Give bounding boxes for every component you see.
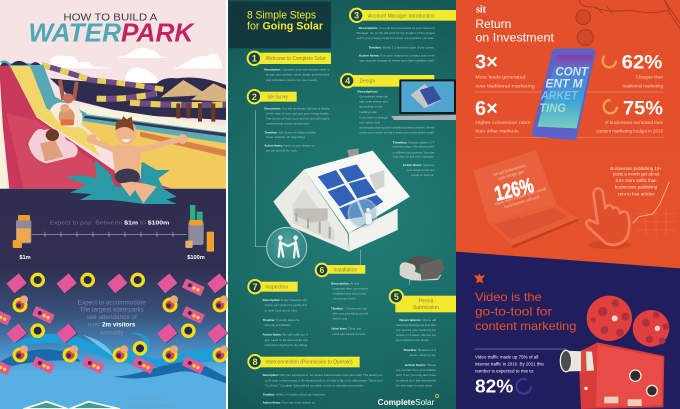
step 3 <box>350 9 456 63</box>
step 7: you need to be around for the <box>265 338 308 342</box>
text: liquidity: You will need <box>129 396 164 402</box>
text: article publishing: businesses publishing <box>615 184 658 189</box>
step 7 <box>248 280 308 347</box>
step 3: Description: You will be introduced to your Account <box>359 26 435 30</box>
step 4: your system look <box>359 121 380 125</box>
stat: 62 percent: 62% <box>622 52 662 73</box>
step 5: Description: Once all <box>399 318 436 322</box>
step 4: Our engineers design the <box>359 95 388 99</box>
step 3: Action Items: It is your chance to contact and meet <box>359 54 435 58</box>
tube slides <box>42 65 226 105</box>
step 1: 1 <box>252 54 257 64</box>
section background <box>228 0 456 409</box>
step 6: important step, our trained <box>333 286 368 290</box>
illustration: laptop: 126% <box>492 174 536 206</box>
step 4: Action Items: Approve <box>403 163 435 167</box>
illustration: laptop: Small businesses <box>493 163 526 177</box>
step 7: review your system for quality and <box>265 303 307 307</box>
section: top scene background <box>0 0 226 189</box>
illustration: phone: CONT <box>555 65 589 78</box>
slides <box>0 60 172 189</box>
step 4: 4 <box>345 76 350 86</box>
illustration: laptop: with blogs get <box>498 169 525 181</box>
step 4: on different city processes. Your plan <box>393 150 435 154</box>
step 4: If you wish to change <box>359 115 388 119</box>
solar panels <box>318 164 383 219</box>
step 6: Timeline: 1-3 hours per day <box>331 306 367 310</box>
step 5: are sent to your local city for <box>396 328 436 332</box>
step 2: This survey will take up to an hour and will require <box>266 117 330 121</box>
text: visitors: Expect to accommodate <box>78 299 146 306</box>
step 8: "Go Solar!" Complete Solar will tell you when to turn on and start your system. <box>265 384 365 388</box>
step 7: Inspection <box>265 284 288 290</box>
pool-float pattern <box>0 273 229 376</box>
stat: six times <box>475 98 531 134</box>
step 5: weeks, varies by city. <box>410 353 436 357</box>
stat: 82 percent <box>475 376 531 397</box>
step 7: same day as installation. <box>265 323 291 327</box>
section: video background <box>456 252 680 409</box>
step 6: permit team inspects the home. <box>333 332 366 336</box>
cost timeline <box>32 232 187 237</box>
step 4 <box>341 74 435 177</box>
figure: boy with arms up <box>50 80 82 128</box>
illustration: laptop: more new people than small <box>494 186 547 207</box>
step 2: of the state of your roof and your energy habits. <box>266 112 329 116</box>
text: article publishing: Businesses publishing 16+ <box>610 166 662 171</box>
connector lines <box>255 110 423 285</box>
step 1: Welcome to Complete Solar <box>266 56 326 62</box>
gable shading <box>293 188 334 242</box>
icon: pointer hand <box>586 188 631 249</box>
stat: three times: 3× <box>475 52 498 74</box>
stat: 62 percent <box>603 52 663 88</box>
lens <box>560 350 594 373</box>
text: video traffic: Video traffic made up 75% of all <box>475 355 538 360</box>
icon: money jar large <box>185 205 214 252</box>
step 5: review in 2-6 weeks, after the city <box>396 333 436 337</box>
illustration: phone: TING <box>539 102 566 115</box>
stat: three times: More leads generated <box>475 74 526 79</box>
illustration: hand dropping coins <box>576 0 680 45</box>
stat: 75 percent: content marketing budget in 2016 <box>596 129 663 134</box>
step 5: Permit <box>419 299 434 305</box>
step 5: are permits from your utilities <box>396 368 437 372</box>
step 2: 2 <box>252 92 257 102</box>
text: liquidity <box>129 396 175 409</box>
stat: three times: over traditional marketing <box>475 83 535 88</box>
camera body <box>579 342 664 409</box>
illustration: laptop: businesses without <box>504 194 541 209</box>
step 7: 7 <box>252 282 258 292</box>
dormer <box>369 170 384 190</box>
step 4: may vary so ask your manager. <box>393 155 434 159</box>
divider <box>474 91 664 93</box>
waves <box>0 333 226 383</box>
divider <box>474 348 566 350</box>
panel: return on investment <box>456 0 680 409</box>
icon: laptop with house <box>391 79 456 120</box>
stat: 75 percent: 75% <box>623 98 663 119</box>
stat: 75 percent: of businesses increased their <box>605 120 663 125</box>
heading: 8 Simple Steps <box>247 9 316 21</box>
step 6: Installation <box>333 267 357 273</box>
step 3: and is your primary contact to answer any questions you have. <box>357 36 435 40</box>
figure: boy in foreground <box>87 116 188 203</box>
step 7: inspection signing for city filings. <box>265 343 308 347</box>
step 7: Action Items: We will notify you if <box>263 332 308 336</box>
step 6: onto and go to finish. <box>333 296 356 300</box>
step 5: Timeline: Between 2-6 <box>403 348 436 352</box>
heading: return on investment <box>475 17 555 44</box>
section: lower water park background <box>0 188 226 409</box>
section background <box>456 0 680 409</box>
heading: video: content marketing <box>475 319 576 333</box>
reel right <box>633 310 669 347</box>
step 8: roof's solar to feed energy to the electrical grid so it's right to flip on by utility power. This is your <box>265 378 383 382</box>
heading: return on investment: Return <box>475 17 511 31</box>
label: one million: $1m <box>19 255 31 261</box>
chimney <box>347 148 359 159</box>
text: video traffic <box>475 355 544 373</box>
pool deck and water <box>77 105 226 189</box>
text: visitors: see attendance of <box>87 314 137 321</box>
step 6: week to stay. <box>333 316 348 320</box>
step 2: Action Items: Agree to your design so <box>264 144 315 148</box>
step 2: Description: Our site technician will look at details <box>264 107 330 111</box>
text: article publishing <box>610 166 662 197</box>
step 6: Action Items: Check, and <box>331 326 361 330</box>
step 4: Description: <box>357 90 378 94</box>
step 4: review your system so that it meets your needs before install. <box>359 131 434 135</box>
step 4: Design <box>360 79 375 85</box>
step 8: 8 <box>252 357 258 367</box>
balcony <box>294 208 328 223</box>
columns <box>296 213 330 238</box>
logo: sit: sit <box>476 5 487 16</box>
step 4: business days. We will proceed <box>393 145 435 149</box>
step 2: one week of signing. <box>266 135 306 139</box>
step 1: and calculates solution for your needs. <box>266 78 318 82</box>
logo: Complete Solar: CompleteSolar <box>378 397 435 407</box>
step 8 <box>248 355 383 405</box>
text: visitors: annually <box>100 329 124 336</box>
splash <box>65 160 177 204</box>
step 2: Timeline: Site Survey is finished within <box>264 130 316 134</box>
step 3: Manager. He or she will work for the duration of the project <box>357 31 435 35</box>
chart: traffic growth <box>633 182 676 237</box>
step 5 <box>390 290 456 388</box>
illustration: film camera <box>560 296 669 409</box>
stat: six times: Higher conversion rates <box>475 120 531 125</box>
step 1: ensure your system meets design and electrical <box>266 73 330 77</box>
illustration: laptop <box>473 150 579 248</box>
step 2 <box>248 90 330 153</box>
icon: money jar small <box>13 215 31 248</box>
stat: 62 percent: Cheaper than <box>636 74 663 79</box>
step 5: and solutions to the annex. <box>396 338 429 342</box>
step 3: 3 <box>354 11 359 21</box>
step 6: installation team will put solar <box>333 291 366 295</box>
step 8: Timeline: Within 2-4 weeks of final city inspection. <box>263 392 326 396</box>
step 8: Action Items: Turn your solar system on. <box>263 401 316 405</box>
heading: video: Video is the <box>475 290 542 304</box>
step 6: with most jobs taking one full <box>333 311 368 315</box>
panel: water park <box>0 0 229 409</box>
step 5: for this step in your area. <box>396 384 433 388</box>
heading: video <box>475 290 576 333</box>
lens: solar installer <box>348 199 377 228</box>
step 5: necessary drawings are final, files <box>396 323 436 327</box>
stat: six times: than other methods <box>475 129 519 134</box>
step 3: Timeline: Within 1-2 business days of the survey. <box>369 45 435 49</box>
text: article publishing: zero to four articles <box>618 192 654 197</box>
divider <box>474 136 664 139</box>
text: visitors: The largest waterparks <box>79 307 144 314</box>
step 7: to meet local permit rules. <box>265 308 298 312</box>
trees <box>50 78 226 120</box>
step 5: to submit your site documents <box>396 379 436 383</box>
step 5: with. If so, you may also have <box>396 373 436 377</box>
reel left <box>587 296 632 341</box>
step 1 <box>248 52 331 82</box>
side wall <box>349 208 398 252</box>
icon: permit stamp <box>400 256 444 281</box>
heading: video: go-to-tool for <box>475 305 552 319</box>
illustration: phone: ENT M <box>545 78 583 91</box>
camera dials <box>630 370 641 381</box>
step 5: Submission <box>413 305 439 311</box>
step 3: Account Manager Introduction <box>368 13 435 19</box>
step 4: right solar system and <box>359 100 388 104</box>
stat: six times: 6× <box>475 98 498 120</box>
text: visitors: over 2m visitors <box>88 322 136 329</box>
step 4: aesthetically pleasing and is installed and kept consistent. We will <box>359 126 435 130</box>
step 4: Timeline: Survey within 2-7 <box>393 140 435 144</box>
illustration: phone: ARKET <box>540 90 578 103</box>
text: visitors <box>78 299 146 336</box>
figure: boy sliding headfirst <box>28 129 78 163</box>
step 2: we can specify the work. <box>266 149 298 153</box>
heading <box>247 9 324 32</box>
heading box <box>229 2 331 48</box>
stat: 82 percent: 82% <box>475 376 514 397</box>
step 2: Site Survey <box>267 94 288 100</box>
step 4: your design so we can <box>407 168 435 172</box>
heading: for Going Solar <box>247 20 324 32</box>
huts <box>161 80 226 122</box>
step 5: 5 <box>394 292 399 302</box>
pool illustrations <box>23 402 120 409</box>
text: expected cost: Expect to pay: Between $1m to $100m <box>49 220 169 226</box>
step 8: Description: With your signed permit, we request interconnection from your utility. This allows your <box>263 373 383 377</box>
circle: handshake <box>267 227 307 267</box>
step 3: your account manager to review your solar installation plan. <box>360 59 435 63</box>
text: video traffic: number is expected to rise to: <box>475 368 534 373</box>
icon: video star <box>474 273 485 283</box>
panel: going solar <box>228 0 456 409</box>
text: video traffic: internet traffic in 2016. By 2021 this <box>475 361 544 366</box>
text: article publishing: posts a month get about <box>613 172 660 177</box>
stat: three times <box>475 52 535 88</box>
step 4: according to city <box>359 105 383 109</box>
step 1: Description: Complete Solar will introduce itself to <box>264 67 330 71</box>
illustration: phone <box>532 49 595 140</box>
illustration: house with solar panels <box>267 148 410 267</box>
stat: 75 percent <box>596 98 663 134</box>
clouds <box>40 48 223 85</box>
step 6: Description: At this <box>331 281 360 285</box>
roof <box>304 151 410 233</box>
step 6: 6 <box>320 265 325 275</box>
step 4: begin to submit. <box>411 173 435 177</box>
step 7: Description: A city inspector will <box>263 298 307 302</box>
step 5: Action Items: There <box>405 363 436 367</box>
label: hundred million: $100m <box>187 255 205 261</box>
stat: 62 percent: traditional marketing <box>622 83 663 88</box>
step 7: Timeline: Typically takes the <box>263 318 300 322</box>
step 8: Interconnection (Permission to Operate) <box>265 360 353 366</box>
heading: return on investment: on Investment <box>475 30 555 44</box>
house walls <box>273 169 349 252</box>
step 4: building code. <box>359 110 378 114</box>
title: how to build a: HOW TO BUILD A <box>63 13 158 24</box>
title: water park: WATERPARK <box>28 18 196 48</box>
text: article publishing: 3.5× more traffic than <box>616 178 657 183</box>
step 6 <box>316 264 368 336</box>
step 2: measurements of your roof and yard. <box>266 122 309 126</box>
